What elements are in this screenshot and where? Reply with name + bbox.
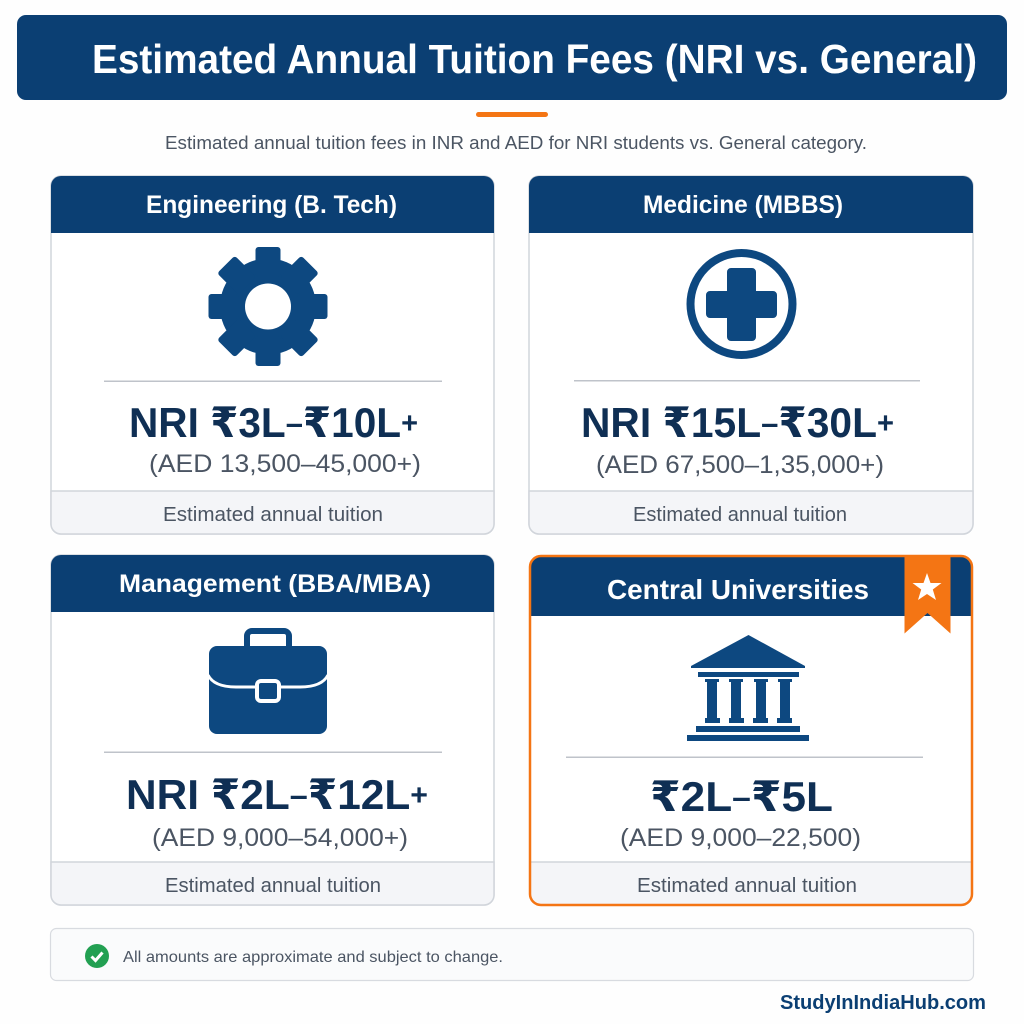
price: medicine: NRI ₹15L — [581, 399, 767, 446]
price: management: NRI ₹2L — [126, 771, 288, 818]
caption: engineering: Estimated annual tuition — [163, 504, 383, 526]
price: engineering: ₹10L — [303, 399, 401, 446]
panel: engineering — [51, 176, 494, 534]
price: engineering: + — [401, 407, 418, 440]
caption: central universities: Estimated annual tuition — [637, 875, 857, 897]
AED range: engineering: (AED 13,500–45,000+) — [149, 450, 421, 478]
price: central universities: ₹2L — [650, 773, 728, 820]
panel: medicine — [529, 176, 973, 534]
icon: ribbon with star — [904, 557, 950, 634]
heading: medicine: Medicine (MBBS) — [643, 191, 843, 219]
AED range: management: (AED 9,000–54,000+) — [152, 824, 408, 852]
AED range: medicine: (AED 67,500–1,35,000+) — [596, 451, 884, 479]
brand name: StudyInIndiaHub.com — [780, 992, 986, 1014]
heading: engineering: Engineering (B. Tech) — [146, 191, 397, 219]
price: medicine: + — [877, 407, 894, 440]
note bar — [50, 928, 974, 980]
price: engineering: – — [286, 405, 303, 441]
price: management: ₹12L — [308, 771, 410, 818]
note text: All amounts are approximate and subject to change. — [123, 949, 503, 966]
caption: medicine: Estimated annual tuition — [633, 504, 847, 526]
subtitle: Estimated annual tuition fees in INR and AED for NRI students vs. General category. — [165, 133, 867, 153]
panel: management — [51, 555, 494, 905]
price: management: + — [410, 779, 428, 812]
caption: management: Estimated annual tuition — [165, 875, 381, 897]
price: engineering: NRI ₹3L — [129, 399, 291, 446]
icon: briefcase — [208, 631, 328, 734]
price: central universities: – — [732, 779, 751, 815]
icon: medical cross — [690, 253, 792, 355]
panel: central universities — [530, 556, 972, 905]
price: management: – — [290, 777, 308, 813]
price: central universities: ₹5L — [751, 773, 833, 820]
icon: institution building — [687, 635, 809, 741]
title banner: Estimated Annual Tuition Fees (NRI vs. General) — [92, 36, 977, 82]
AED range: central universities: (AED 9,000–22,500) — [620, 824, 861, 852]
heading: central universities: Central Universities — [607, 574, 869, 605]
icon: green check — [85, 944, 109, 968]
price: medicine: ₹30L — [778, 399, 877, 446]
orange accent bar — [476, 112, 548, 117]
heading: management: Management (BBA/MBA) — [119, 570, 431, 598]
icon: gear — [208, 247, 328, 366]
title banner — [17, 15, 1007, 100]
price: medicine: – — [761, 405, 778, 441]
